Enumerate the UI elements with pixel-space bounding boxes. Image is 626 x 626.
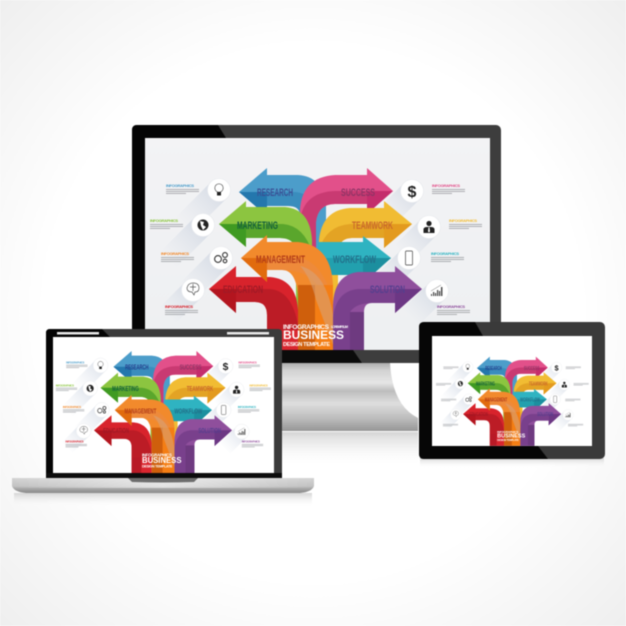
- laptop shadow: [14, 493, 312, 507]
- laptop screen infographic: INFOGRAPHICS: [239, 360, 257, 364]
- laptop screen infographic: INFOGRAPHICS: [66, 440, 84, 444]
- tablet screen infographic: TEAMWORK: [529, 381, 548, 388]
- bottom title: BUSINESS: [283, 328, 344, 342]
- dollar sign: $: [408, 184, 417, 201]
- bottom title: LOREM IPSUM: [331, 325, 348, 329]
- laptop screen infographic: INFOGRAPHICS: [66, 360, 85, 364]
- laptop screen infographic: INFOGRAPHICS: [238, 405, 256, 409]
- captions: INFOGRAPHICS: [166, 183, 194, 188]
- laptop screen infographic: RESEARCH: [125, 363, 148, 371]
- tablet screen infographic: BUSINESS: [497, 434, 525, 440]
- tablet screen infographic: DESIGN TEMPLATE: [497, 438, 519, 442]
- laptop screen infographic: [56, 351, 271, 474]
- bottom title: DESIGN TEMPLATE: [283, 342, 330, 348]
- tablet screen infographic: $: [554, 363, 559, 372]
- captions: INFOGRAPHICS: [437, 304, 465, 309]
- arrow labels: WORKFLOW: [333, 254, 376, 266]
- captions: INFOGRAPHICS: [432, 183, 460, 188]
- arrow labels: MARKETING: [237, 220, 278, 232]
- tablet: [419, 322, 605, 468]
- laptop screen infographic: INFOGRAPHICS: [63, 405, 81, 409]
- laptop screen infographic: INFOGRAPHICS: [242, 440, 260, 444]
- tablet screen infographic: SOLUTION: [537, 412, 553, 418]
- captions: [150, 183, 477, 309]
- tablet screen infographic: INFOGRAPHICS: [497, 430, 518, 434]
- tablet screen infographic: WORKFLOW: [520, 398, 540, 404]
- laptop base: [12, 478, 314, 493]
- laptop screen infographic: SUCCESS: [180, 363, 202, 371]
- captions: INFOGRAPHICS: [150, 218, 178, 223]
- tablet screen infographic: RESEARCH: [485, 366, 502, 372]
- tablet screen infographic: EDUCATION: [470, 412, 488, 418]
- tablet body: [419, 322, 605, 459]
- laptop screen infographic: DESIGN TEMPLATE: [142, 465, 173, 469]
- laptop lid: [46, 329, 282, 478]
- arrow labels: MANAGEMENT: [256, 254, 305, 266]
- monitor stand: [282, 362, 418, 466]
- laptop screen infographic: BUSINESS: [142, 456, 182, 465]
- bottom title: INFOGRAPHICS: [283, 324, 330, 331]
- arrow labels: RESEARCH: [257, 187, 293, 199]
- monitor bezel: [132, 125, 501, 363]
- laptop screen infographic: TEAMWORK: [187, 385, 214, 393]
- laptop screen infographic: WORKFLOW: [174, 407, 202, 415]
- monitor: [132, 125, 501, 466]
- laptop screen infographic: INFOGRAPHICS: [56, 383, 74, 387]
- arrow labels: SOLUTION: [370, 284, 405, 296]
- laptop screen infographic: EDUCATION: [103, 427, 129, 435]
- arrow labels: TEAMWORK: [352, 220, 393, 232]
- tablet shadow: [420, 458, 604, 468]
- laptop: [12, 329, 314, 507]
- laptop screen infographic: MANAGEMENT: [124, 407, 157, 415]
- laptop screen infographic: INFOGRAPHICS: [142, 452, 172, 458]
- tablet screen infographic: MARKETING: [476, 381, 495, 388]
- laptop screen infographic: MARKETING: [112, 385, 139, 393]
- laptop screen infographic: $: [223, 362, 229, 373]
- arrow labels: SUCCESS: [341, 187, 375, 199]
- captions: INFOGRAPHICS: [431, 251, 459, 256]
- laptop screen infographic: SOLUTION: [198, 427, 221, 435]
- tablet screen infographic: MANAGEMENT: [485, 398, 508, 404]
- monitor screen infographic: [150, 168, 482, 356]
- captions: INFOGRAPHICS: [165, 304, 193, 309]
- bottom title: [283, 324, 348, 348]
- tablet screen infographic: [436, 357, 589, 446]
- captions: INFOGRAPHICS: [449, 218, 477, 223]
- laptop screen infographic: INFOGRAPHICS: [250, 383, 268, 387]
- tablet screen infographic: SUCCESS: [524, 366, 540, 372]
- captions: INFOGRAPHICS: [161, 251, 189, 256]
- arrow labels: [223, 187, 405, 296]
- arrow labels: EDUCATION: [223, 284, 263, 296]
